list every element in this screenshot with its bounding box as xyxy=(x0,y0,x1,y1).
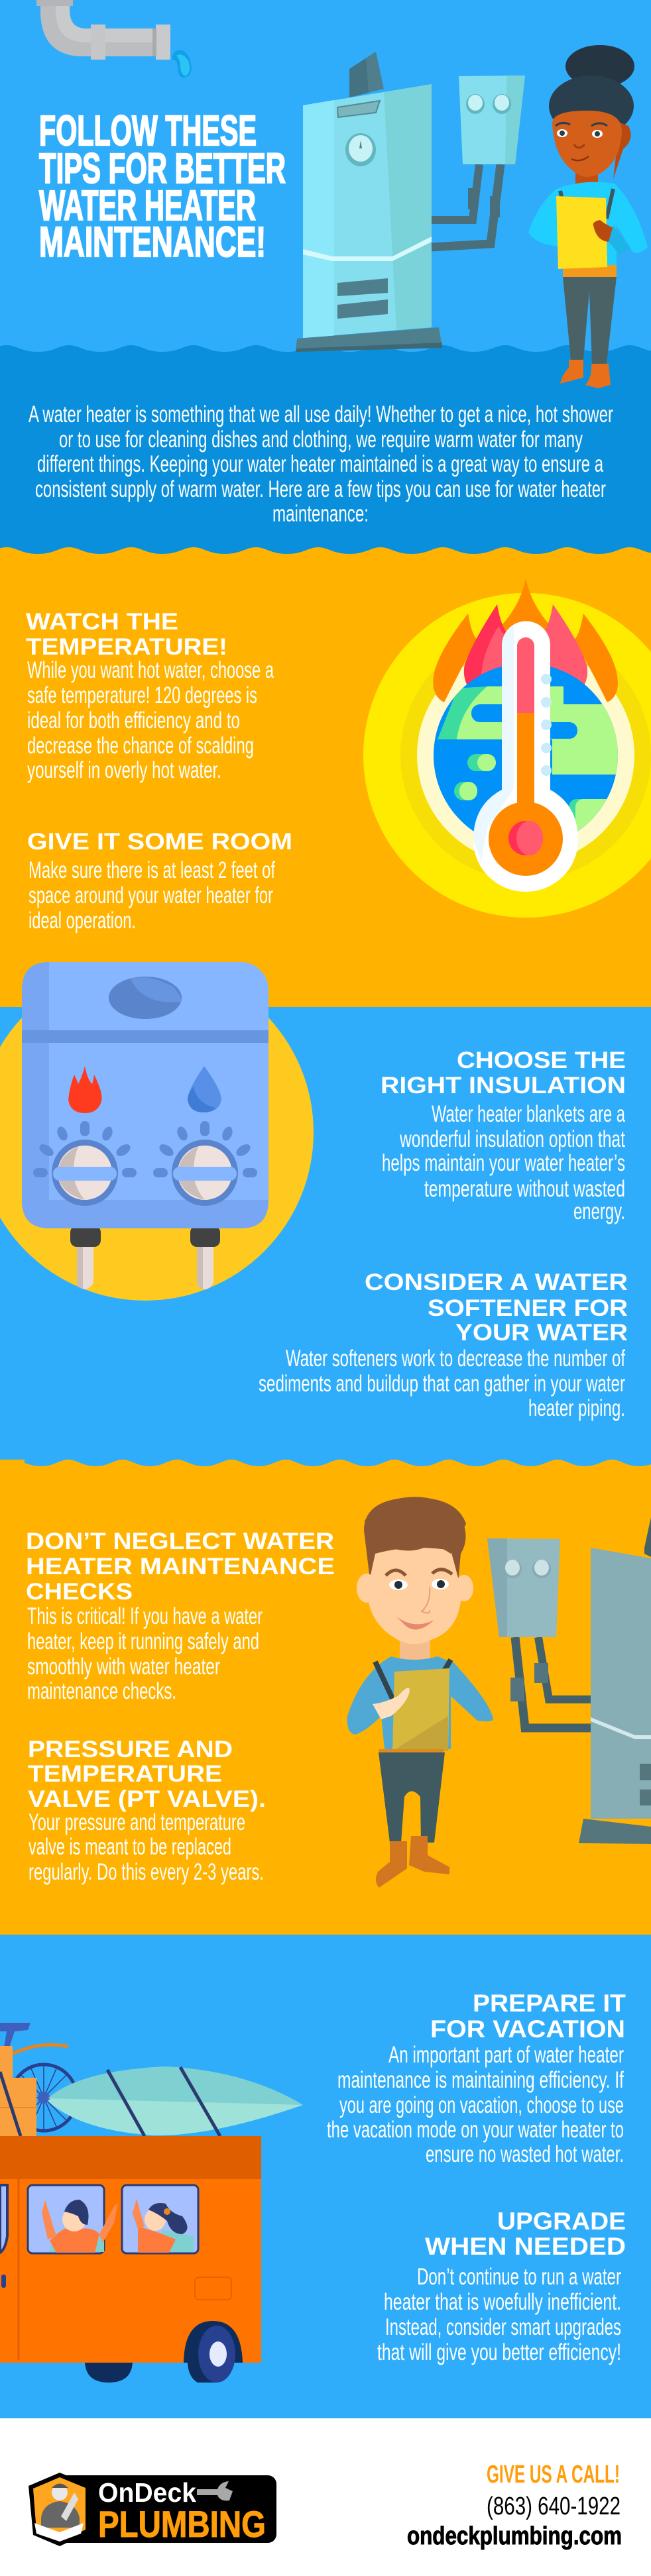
water drop glyph xyxy=(188,1066,221,1112)
yellow circle behind wall heater xyxy=(0,1018,314,1301)
illustration: woman plumber with clipboard xyxy=(528,45,648,388)
man: belt xyxy=(379,1749,444,1764)
tip: pressure and temperature valve: VALVE (PT VALVE). xyxy=(28,1786,266,1812)
tip: watch the temperature xyxy=(26,609,274,783)
tip: watch the temperature: WATCH THE xyxy=(26,609,178,635)
tip: don't neglect maintenance checks: This is critical! If you have a water xyxy=(27,1603,263,1629)
title: TIPS FOR BETTER xyxy=(39,144,286,192)
man: face xyxy=(367,1548,461,1644)
tip: pressure and temperature valve: regularly. Do this every 2-3 years. xyxy=(29,1859,264,1885)
man: trousers xyxy=(379,1752,445,1843)
man: clipboard and hand xyxy=(392,1668,449,1751)
tip: upgrade when needed: UPGRADE xyxy=(497,2208,626,2235)
logo shield xyxy=(29,2473,89,2546)
tip: watch the temperature: ideal for both efficiency and to xyxy=(27,708,240,733)
tip: watch the temperature: yourself in overly hot water. xyxy=(27,757,221,783)
tip: don't neglect maintenance checks xyxy=(26,1529,335,1704)
tip: prepare it for vacation: FOR VACATION xyxy=(430,2015,625,2043)
tip: consider a water softener: CONSIDER A WATER xyxy=(365,1269,628,1295)
tip: watch the temperature: While you want hot water, choose a xyxy=(27,657,274,683)
tip: choose the right insulation: RIGHT INSULATION xyxy=(381,1073,626,1099)
tip: give it some room: Make sure there is at least 2 feet of xyxy=(29,857,275,883)
tip: consider a water softener: SOFTENER FOR xyxy=(428,1295,628,1321)
logo: OnDeck Plumbing: PLUMBING xyxy=(98,2503,266,2545)
illustration: man with clipboard xyxy=(347,1497,493,1888)
man: hair back xyxy=(364,1497,465,1590)
man: boots xyxy=(376,1841,407,1888)
globe xyxy=(434,667,618,832)
bicycle xyxy=(0,2023,77,2131)
van body xyxy=(0,2136,261,2363)
tip: don't neglect maintenance checks: heater, keep it running safely and xyxy=(27,1629,259,1654)
tip: don't neglect maintenance checks: smoothly with water heater xyxy=(27,1654,220,1680)
clipboard xyxy=(556,196,607,269)
tip: don't neglect maintenance checks: HEATER MAINTENANCE xyxy=(26,1554,335,1580)
icon: wall-mounted water heater xyxy=(22,962,268,1289)
tip: watch the temperature: TEMPERATURE! xyxy=(26,634,227,660)
logo: OnDeck Plumbing xyxy=(29,2473,276,2546)
tip: consider a water softener: YOUR WATER xyxy=(455,1320,628,1346)
illustration: van with family and surfboard xyxy=(0,2023,303,2383)
pants xyxy=(563,277,617,364)
tip: watch the temperature: decrease the chance of scalding xyxy=(27,733,254,759)
tip: give it some room xyxy=(27,829,292,934)
tip: don't neglect maintenance checks: CHECKS xyxy=(26,1579,133,1605)
passenger: girl xyxy=(133,2198,187,2253)
title xyxy=(39,107,286,266)
tip: upgrade when needed xyxy=(377,2208,626,2365)
tip: prepare it for vacation xyxy=(327,1990,626,2167)
tip: give it some room: GIVE IT SOME ROOM xyxy=(27,829,292,855)
tip: choose the right insulation: CHOOSE THE xyxy=(457,1047,626,1073)
tip: pressure and temperature valve: TEMPERATURE xyxy=(28,1761,222,1787)
title: WATER HEATER xyxy=(39,182,256,229)
tip: prepare it for vacation: PREPARE IT xyxy=(473,1990,626,2017)
tip: choose the right insulation: energy. xyxy=(573,1199,625,1224)
tip: don't neglect maintenance checks: maintenance checks. xyxy=(27,1678,176,1704)
man: shirt and arms xyxy=(347,1656,493,1749)
icon: dripping pipe xyxy=(36,0,192,78)
icon: thermometer over burning globe xyxy=(363,578,651,918)
boxes xyxy=(0,2046,36,2136)
tip: pressure and temperature valve: PRESSURE AND xyxy=(28,1737,233,1762)
logo: OnDeck Plumbing: OnDeck xyxy=(98,2477,196,2508)
thermometer xyxy=(473,621,578,892)
contact details xyxy=(407,2461,622,2550)
tip: pressure and temperature valve: Your pressure and temperature xyxy=(29,1809,245,1835)
illustration: heater beside the man xyxy=(487,1517,651,1844)
logo wrench xyxy=(197,2481,233,2500)
title: FOLLOW THESE xyxy=(39,107,257,154)
wall panel pipes xyxy=(432,164,501,247)
intro paragraph xyxy=(29,402,613,527)
tip: pressure and temperature valve: valve is meant to be replaced xyxy=(29,1834,231,1860)
tip: watch the temperature: safe temperature! 120 degrees is xyxy=(27,682,257,708)
dial ticks xyxy=(33,1121,257,1177)
tip: consider a water softener xyxy=(259,1269,628,1421)
surfboard xyxy=(48,2066,303,2136)
tip: pressure and temperature valve xyxy=(28,1737,266,1885)
intro paragraph: maintenance: xyxy=(272,501,369,527)
flame glyph xyxy=(68,1066,102,1113)
tip: don't neglect maintenance checks: DON’T NEGLECT WATER xyxy=(26,1529,334,1554)
flames xyxy=(433,578,618,702)
tip: upgrade when needed: WHEN NEEDED xyxy=(425,2233,626,2260)
dials xyxy=(52,1140,238,1206)
passenger: boy xyxy=(42,2200,118,2253)
boots xyxy=(560,360,583,384)
tip: give it some room: ideal operation. xyxy=(29,908,136,934)
tip: choose the right insulation xyxy=(381,1047,626,1224)
van windows xyxy=(0,2185,198,2253)
tip: give it some room: space around your water heater for xyxy=(29,883,273,908)
shirt xyxy=(528,182,648,265)
illustration: water heater xyxy=(296,52,525,352)
title: MAINTENANCE! xyxy=(39,218,266,266)
van wheels xyxy=(85,2321,243,2383)
